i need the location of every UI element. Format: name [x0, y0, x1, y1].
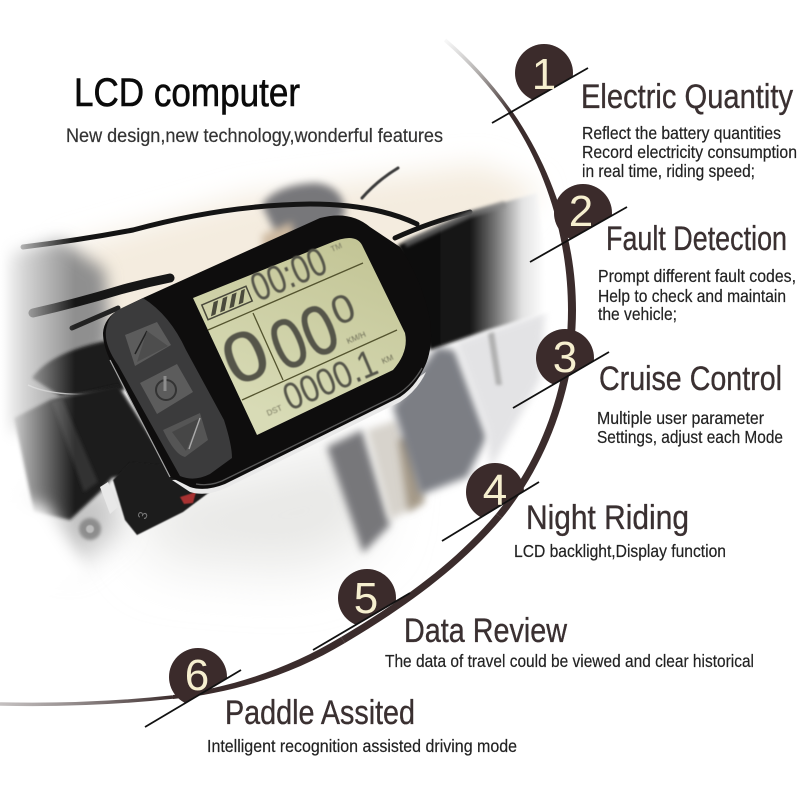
wheel: silver spokes: [455, 312, 545, 470]
item 1: Electric Quantity: Reflect the battery quantities: [582, 123, 781, 143]
white chrome rim: [172, 372, 426, 494]
light grey lower backdrop: [130, 440, 380, 570]
battery gauge: [202, 286, 252, 320]
item 2: Fault Detection: the vehicle;: [598, 304, 677, 324]
LCD readouts: 0: [210, 312, 280, 401]
LCD readouts: [210, 239, 395, 419]
item 5: Data Review: [385, 612, 754, 671]
marker 6: [145, 648, 241, 727]
marker 6: 6: [185, 651, 209, 700]
marker 1: 1: [532, 50, 556, 99]
lower left tube shadow: [30, 480, 120, 570]
wheel: dark left strip: [327, 430, 390, 553]
item 4: Night Riding: [514, 499, 726, 561]
marker 3: [513, 329, 609, 408]
LCD readouts: KM/H: [345, 330, 367, 346]
white fade at left edge: [0, 200, 75, 600]
marker 2: 2: [569, 187, 593, 236]
item 6: Paddle Assited: Intelligent recognition assisted driving mode: [207, 736, 517, 756]
wheel: speckled tyre: [393, 347, 487, 495]
item 5: Data Review: The data of travel could be viewed and clear historical: [385, 651, 754, 671]
item 6: Paddle Assited: Paddle Assited: [225, 694, 415, 732]
button: down: [163, 413, 208, 457]
marker 1: [492, 44, 588, 123]
keypad panel: [106, 298, 232, 479]
white fade at lower left: [0, 500, 95, 620]
photo: blurred bike handlebar backdrop: [0, 165, 553, 620]
marker 5: 5: [354, 574, 378, 623]
LCD display unit: [103, 215, 431, 494]
handlebar right section: [398, 193, 553, 350]
warm beige backdrop: [60, 165, 540, 340]
LCD divider lines: [208, 263, 397, 400]
item 5: Data Review: Data Review: [404, 612, 567, 650]
curved timeline arc: [0, 40, 576, 704]
marker 3: 3: [553, 333, 577, 382]
title: LCD computer: [74, 71, 300, 115]
item 1: Electric Quantity: in real time, riding speed;: [582, 161, 755, 181]
subtitle: New design,new technology,wonderful features: [66, 126, 443, 147]
cables behind the handlebar: [23, 168, 470, 328]
LCD readouts: KM: [380, 353, 395, 366]
LCD screen: [193, 238, 406, 435]
item 3: Cruise Control: [597, 360, 783, 447]
dark loop under the cables: [32, 340, 125, 396]
grip shifter below display: 3: [134, 510, 151, 521]
item 2: Fault Detection: [598, 220, 796, 324]
item 4: Night Riding: LCD backlight,Display function: [514, 541, 726, 561]
marker 4: [442, 463, 539, 541]
handlebar left section: [14, 385, 172, 520]
button: power: [140, 364, 193, 414]
LCD readouts: 00: [258, 288, 350, 386]
marker 4: 4: [483, 466, 507, 515]
LCD readouts: TM: [329, 241, 344, 254]
black housing: [103, 215, 431, 489]
LCD readouts: DST: [265, 403, 284, 418]
item 3: Cruise Control: Multiple user parameter: [597, 408, 764, 428]
grip shifter below display: [79, 462, 222, 540]
button: up: [125, 322, 171, 366]
item 1: Electric Quantity: [581, 78, 797, 181]
LCD readouts: 00:00: [244, 239, 333, 310]
item 4: Night Riding: Night Riding: [526, 499, 689, 537]
LCD readouts: 0: [324, 285, 362, 334]
LCD readouts: 0000.1: [277, 342, 384, 419]
vertical tyre behind the display: [262, 183, 345, 262]
marker 2: [530, 184, 627, 262]
marker 5: [313, 569, 410, 650]
wheel: chrome strip: [367, 420, 424, 520]
grey left haze: [0, 240, 110, 430]
item 6: Paddle Assited: [207, 694, 517, 756]
